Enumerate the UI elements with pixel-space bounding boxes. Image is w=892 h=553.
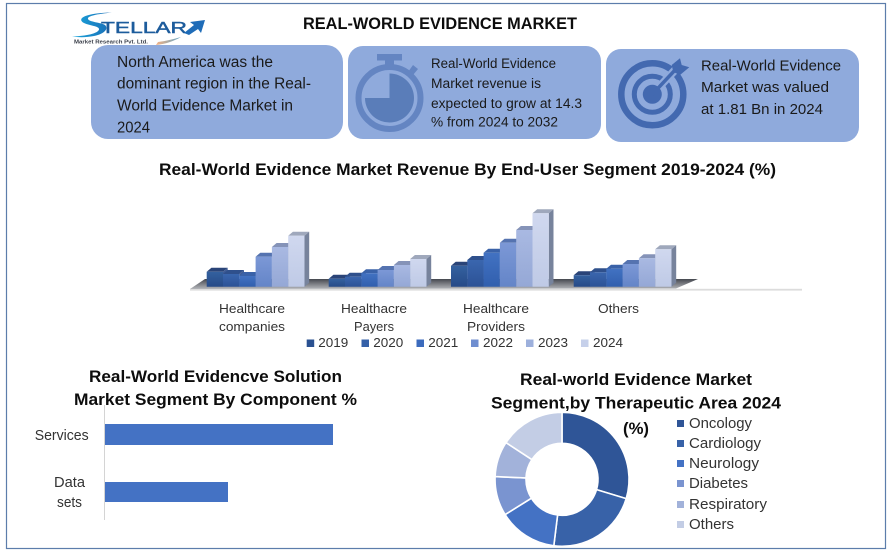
- bars: Healthacre Payers: [329, 255, 431, 287]
- panel: dominant region: [91, 45, 343, 139]
- panel: revenue growth: % from 2024 to 2032: [431, 114, 558, 130]
- slice: Diabetes 9.5%: [495, 477, 531, 515]
- slice: Respiratory 8.6%: [495, 443, 532, 478]
- legend: therapeutic areas: Neurology: [689, 455, 760, 472]
- panel: market value: [606, 49, 859, 142]
- bars: Healthcare Providers: [451, 209, 554, 287]
- bar chart: solution by component: [35, 405, 333, 520]
- heading: component chart: Market Segment By Component %: [74, 390, 357, 409]
- panel: dominant region: dominant region in the Real-: [117, 76, 311, 92]
- slice: Oncology 29.6%: [562, 412, 629, 499]
- bars: Others: [574, 245, 676, 287]
- heading: therapeutic area chart: [491, 370, 782, 438]
- legend: years: 2024: [593, 335, 623, 350]
- logo: Stellar Market Research: [72, 12, 205, 46]
- legend: years: 2021: [428, 335, 458, 350]
- axis label: Data sets: sets: [57, 495, 82, 511]
- panel: dominant region: North America was the: [117, 54, 273, 71]
- axis label: Data sets: [54, 475, 86, 511]
- donut chart: therapeutic area: [495, 412, 629, 546]
- axis label: Services: Services: [35, 428, 89, 444]
- panel: revenue growth: expected to grow at 14.3: [431, 96, 582, 111]
- category labels: Providers: [467, 319, 526, 334]
- logo: Stellar Market Research: Market Research Pvt. Ltd.: [74, 40, 148, 46]
- panel: market value: Market was valued: [701, 79, 829, 96]
- icon: stopwatch: [358, 54, 420, 129]
- legend: therapeutic areas: Others: [689, 516, 734, 533]
- legend: years: [307, 335, 623, 350]
- category labels: Healthcare: [463, 301, 529, 316]
- slice: Neurology 14.2%: [505, 498, 558, 546]
- panel: market value: Real-World Evidence: [701, 58, 841, 74]
- bar: Services: [105, 424, 333, 445]
- legend: therapeutic areas: Cardiology: [689, 435, 761, 452]
- panel: revenue growth: [348, 46, 601, 139]
- 3D bar chart: revenue by end-user segment: [190, 209, 802, 350]
- category labels: Healthacre: [341, 301, 407, 316]
- category labels: companies: [219, 319, 286, 334]
- legend: years: 2023: [538, 335, 568, 350]
- legend: years: 2022: [483, 335, 513, 350]
- panel: dominant region: World Evidence Market in: [117, 98, 293, 114]
- heading: therapeutic area chart: Real-world Evidence Market: [520, 370, 752, 389]
- bars: Healthcare companies: [207, 232, 309, 287]
- panel: dominant region: 2024: [117, 120, 150, 136]
- heading: therapeutic area chart: (%): [623, 419, 649, 438]
- category labels: Others: [598, 301, 640, 316]
- title: REAL-WORLD EVIDENCE MARKET: [303, 14, 578, 33]
- heading: component chart: Real-World Evidencve Solution: [89, 367, 342, 386]
- legend: years: 2020: [373, 335, 403, 350]
- logo: Stellar Market Research: TELLAR: [101, 20, 187, 37]
- legend: therapeutic areas: Respiratory: [689, 496, 767, 513]
- slice: Cardiology 22.3%: [554, 490, 626, 546]
- category labels: Payers: [354, 319, 394, 334]
- legend: therapeutic areas: [677, 415, 767, 533]
- category labels: Healthcare: [219, 301, 285, 316]
- heading: therapeutic area chart: Segment,by Therapeutic Area 2024: [491, 394, 782, 412]
- bar: Data sets: [105, 482, 228, 502]
- heading: end-user segment chart: Real-World Evidence Market Revenue By End-User Segment 2019-2024 (%): [159, 160, 776, 179]
- icon: target with arrow: [621, 58, 689, 125]
- legend: therapeutic areas: Diabetes: [689, 475, 748, 492]
- panel: revenue growth: Real-World Evidence: [431, 56, 556, 71]
- panel: revenue growth: Market revenue is: [431, 76, 541, 91]
- axis label: Data sets: Data: [54, 475, 86, 491]
- heading: component chart: [74, 367, 357, 409]
- legend: therapeutic areas: Oncology: [689, 415, 752, 432]
- panel: market value: at 1.81 Bn in 2024: [701, 101, 823, 118]
- category labels: [219, 301, 640, 334]
- slice: Others 15.8%: [506, 412, 562, 460]
- legend: years: 2019: [318, 335, 348, 350]
